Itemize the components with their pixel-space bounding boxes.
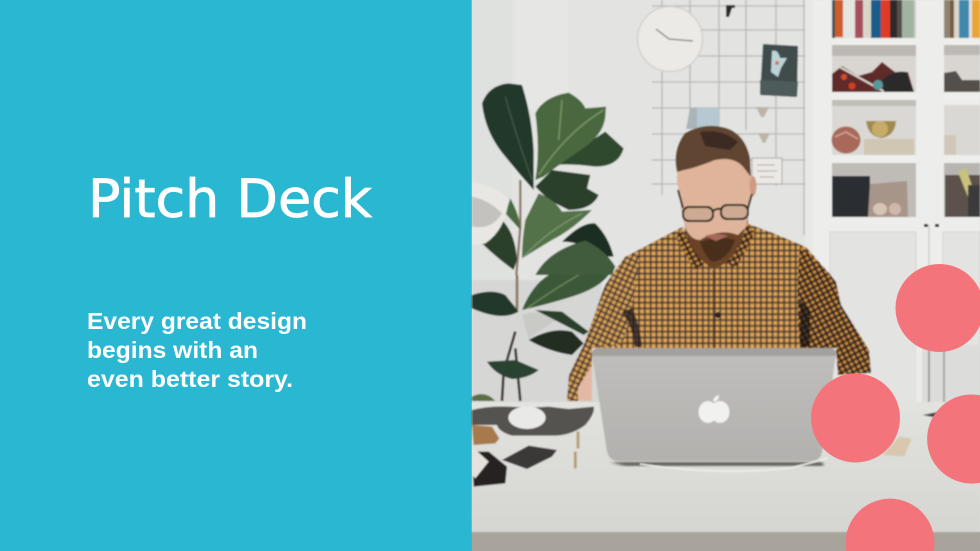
glasses xyxy=(678,190,752,221)
plant lower leaves xyxy=(472,275,609,401)
dark box and jar xyxy=(832,176,870,217)
wire grid on wall xyxy=(652,0,805,235)
wall xyxy=(472,0,980,405)
laptop xyxy=(592,348,836,471)
lower doors xyxy=(830,232,916,403)
books xyxy=(832,0,835,38)
shirt xyxy=(567,223,871,401)
apple logo xyxy=(698,395,730,423)
beard xyxy=(684,225,745,268)
wood block xyxy=(472,425,499,445)
desk items xyxy=(472,406,594,487)
mouse pad xyxy=(472,406,594,436)
photo: man working on a laptop at a desk xyxy=(472,0,980,551)
wall pinned items xyxy=(686,5,798,184)
subtitle text block xyxy=(87,308,307,392)
mouse xyxy=(508,406,546,429)
clock xyxy=(638,6,702,72)
notebook xyxy=(502,446,557,469)
shelf shadows xyxy=(832,45,916,56)
subtitle text block: begins with an xyxy=(87,337,258,363)
subtitle text block: even better story. xyxy=(87,366,293,392)
man xyxy=(567,126,871,401)
desk xyxy=(472,402,980,532)
ornaments xyxy=(832,62,914,92)
hair xyxy=(676,126,751,177)
ear xyxy=(750,176,756,196)
pencil xyxy=(575,432,578,468)
shelf boards xyxy=(832,38,916,45)
title: Pitch Deck xyxy=(88,169,372,230)
bowl and stone xyxy=(832,126,860,154)
desk front edge xyxy=(472,532,980,551)
decorative coral circles xyxy=(811,264,980,551)
subtitle text block: Every great design xyxy=(87,308,307,334)
panel: teal background xyxy=(0,0,472,551)
photo backdrop xyxy=(472,0,980,551)
neck xyxy=(685,215,748,272)
face xyxy=(677,148,751,259)
bookcase xyxy=(805,0,980,405)
clip and paper xyxy=(472,452,507,487)
shelf interiors xyxy=(832,0,916,38)
fiddle leaf plant xyxy=(472,83,624,275)
pens on right shelf xyxy=(945,175,980,217)
hand xyxy=(578,365,592,401)
phone and pen on desk xyxy=(883,412,939,457)
